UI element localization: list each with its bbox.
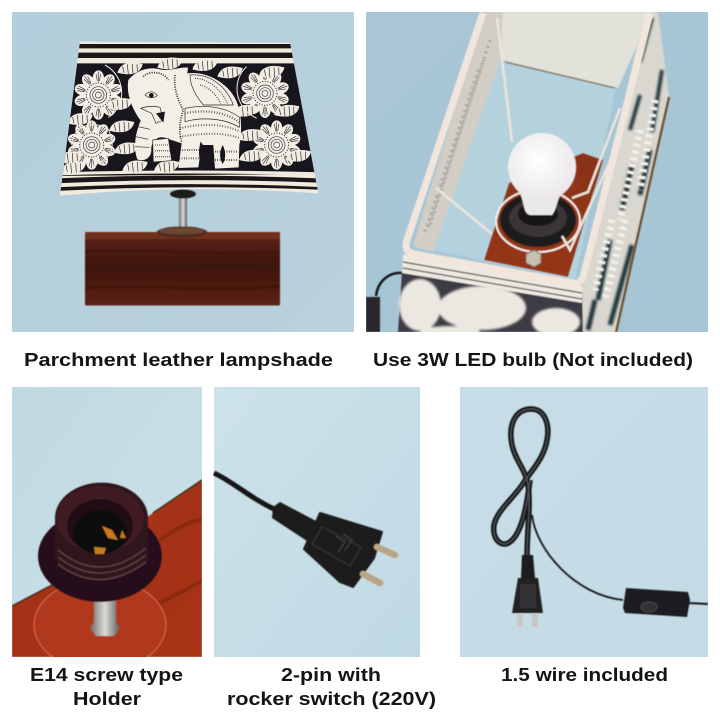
- left inner wall: [413, 12, 503, 252]
- metal rod and disc: [157, 190, 207, 238]
- floral medallions: [66, 69, 302, 170]
- caption: 2-pin rocker switch: rocker switch (220V): [227, 688, 436, 709]
- wooden base: [484, 153, 603, 277]
- lamp socket: [38, 483, 162, 602]
- caption: wire: 1.5 wire included: [501, 664, 668, 685]
- caption: parchment leather lampshade: Parchment leather lampshade: [24, 349, 333, 370]
- plug cable: [214, 473, 276, 510]
- metal stem: [90, 600, 120, 636]
- panel: 2-pin plug photo: [214, 387, 420, 657]
- elephant-painted lampshade: [50, 42, 327, 196]
- wooden disc: [33, 588, 167, 657]
- panel: 1.5 wire photo: [460, 387, 708, 657]
- opening shows backdrop: [433, 60, 616, 280]
- bolt: [526, 250, 541, 267]
- rocker switch: [623, 588, 690, 617]
- caption: E14 holder: [30, 664, 183, 709]
- cable and plug behind shade: [366, 273, 402, 332]
- caption: E14 holder: Holder: [73, 688, 141, 709]
- panel: E14 screw holder photo: [12, 387, 202, 671]
- strain relief: [521, 555, 535, 578]
- wooden table edge: [12, 480, 202, 657]
- right outer panel: [582, 12, 669, 332]
- frame wires: [436, 18, 640, 250]
- elephant: [128, 68, 241, 169]
- 2-pin plug body: [304, 513, 382, 587]
- bulb holder: [496, 190, 580, 252]
- brass pins: [377, 547, 395, 555]
- caption: LED bulb: Use 3W LED bulb (Not included): [373, 349, 693, 370]
- leaf ornaments: [57, 58, 311, 173]
- LED bulb: [508, 133, 576, 215]
- wooden base: [85, 232, 280, 306]
- coiled black wire: [494, 409, 708, 604]
- strain relief: [272, 502, 318, 541]
- caption: E14 holder: E14 screw type: [30, 664, 183, 685]
- plug: [512, 578, 543, 627]
- panel: parchment leather lampshade photo: [12, 12, 354, 332]
- shade rim frame: [406, 13, 650, 283]
- caption: 2-pin rocker switch: [227, 664, 436, 709]
- back inner wall: [500, 12, 652, 88]
- caption: 2-pin rocker switch: 2-pin with: [281, 664, 381, 685]
- front outer panel: [398, 254, 583, 338]
- panel: LED bulb view inside shade: [366, 12, 708, 338]
